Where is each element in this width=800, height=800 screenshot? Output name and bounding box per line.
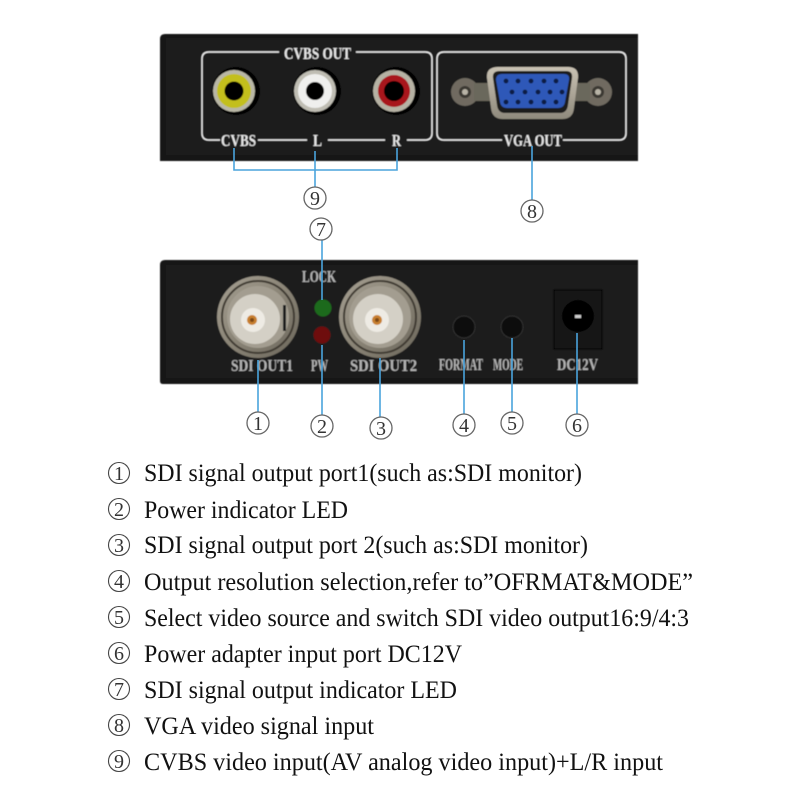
icon: green LOCK LED bbox=[314, 300, 332, 316]
legend item 4: 4 bbox=[114, 571, 124, 593]
legend item 9: CVBS video input(AV analog video input)+L/R input bbox=[144, 749, 663, 776]
callout number 3: 3 bbox=[376, 418, 386, 440]
silkscreen labels: bottom panel: DC12V bbox=[557, 355, 599, 374]
silkscreen labels: top panel: CVBS OUT bbox=[284, 44, 352, 63]
silkscreen labels: bottom panel: SDI OUT2 bbox=[350, 356, 417, 375]
legend item 7: SDI signal output indicator LED bbox=[144, 677, 457, 704]
callout number 8: 8 bbox=[527, 201, 537, 223]
silkscreen labels: top panel: CVBS bbox=[221, 131, 256, 150]
callout number 9: 9 bbox=[310, 188, 320, 210]
callout number 5: 5 bbox=[507, 413, 517, 435]
callout number 3 bbox=[370, 417, 392, 440]
callout number 4 bbox=[453, 414, 475, 437]
icon: red PW LED bbox=[314, 326, 330, 344]
label frame: CVBS OUT bbox=[202, 52, 432, 140]
panel: rear device output side bbox=[160, 34, 638, 161]
icon: DC power jack bbox=[554, 290, 602, 349]
silkscreen labels: top panel: VGA OUT bbox=[504, 131, 562, 150]
legend item 5: 5 bbox=[114, 607, 124, 629]
silkscreen labels: bottom panel: PW bbox=[311, 356, 328, 375]
legend item 9: 9 bbox=[114, 751, 124, 773]
callout number 1 bbox=[247, 412, 269, 435]
callout number 2 bbox=[311, 415, 333, 438]
silkscreen labels: bottom panel bbox=[231, 267, 599, 375]
label frame: VGA OUT bbox=[437, 52, 626, 140]
callout number 6 bbox=[566, 414, 588, 437]
silkscreen labels: bottom panel: FORMAT bbox=[439, 355, 483, 374]
legend item 5: Select video source and switch SDI video output16:9/4:3 bbox=[144, 605, 689, 632]
icon: white RCA jack bbox=[293, 67, 341, 115]
legend item 3: 3 bbox=[114, 535, 124, 557]
callout number 2: 2 bbox=[317, 416, 327, 438]
icon: yellow RCA jack bbox=[212, 67, 260, 115]
callout number 6: 6 bbox=[572, 415, 582, 437]
legend item 3: SDI signal output port 2(such as:SDI monitor) bbox=[144, 532, 588, 559]
callout leaders bbox=[234, 146, 577, 417]
silkscreen labels: bottom panel: MODE bbox=[493, 355, 523, 374]
silkscreen labels: top panel bbox=[221, 44, 562, 150]
callout number 7 bbox=[310, 218, 332, 241]
icon: red RCA jack bbox=[372, 67, 420, 115]
legend item 8: 8 bbox=[114, 715, 124, 737]
legend item 7: 7 bbox=[114, 679, 124, 701]
icon: VGA connector bbox=[451, 67, 612, 119]
silkscreen labels: bottom panel: SDI OUT1 bbox=[231, 356, 293, 375]
icon: MODE button bbox=[501, 316, 523, 338]
callout number 8 bbox=[521, 200, 543, 223]
legend item 4: Output resolution selection,refer to”OFRMAT&MODE” bbox=[144, 569, 693, 596]
legend list bbox=[108, 460, 693, 776]
legend item 8: VGA video signal input bbox=[144, 713, 374, 740]
callout number 5 bbox=[501, 412, 523, 435]
callout number 9 bbox=[304, 187, 326, 210]
legend item 6: 6 bbox=[114, 643, 124, 665]
icon: FORMAT button bbox=[453, 316, 475, 338]
legend item 6: Power adapter input port DC12V bbox=[144, 641, 462, 668]
silkscreen labels: bottom panel: LOCK bbox=[302, 267, 337, 286]
silkscreen labels: top panel: R bbox=[392, 131, 402, 150]
legend item 1: SDI signal output port1(such as:SDI monitor) bbox=[144, 460, 582, 487]
callout number 4: 4 bbox=[459, 415, 469, 437]
silkscreen labels: top panel: L bbox=[313, 131, 322, 150]
icon: BNC connector 2 bbox=[339, 276, 421, 358]
callout number 1: 1 bbox=[253, 413, 263, 435]
panel: front device input side bbox=[160, 260, 638, 384]
icon: BNC connector 1 bbox=[217, 276, 299, 358]
callout number 7: 7 bbox=[316, 219, 326, 241]
legend item 2: 2 bbox=[114, 499, 124, 521]
legend item 1: 1 bbox=[114, 463, 124, 485]
legend item 2: Power indicator LED bbox=[144, 497, 348, 524]
